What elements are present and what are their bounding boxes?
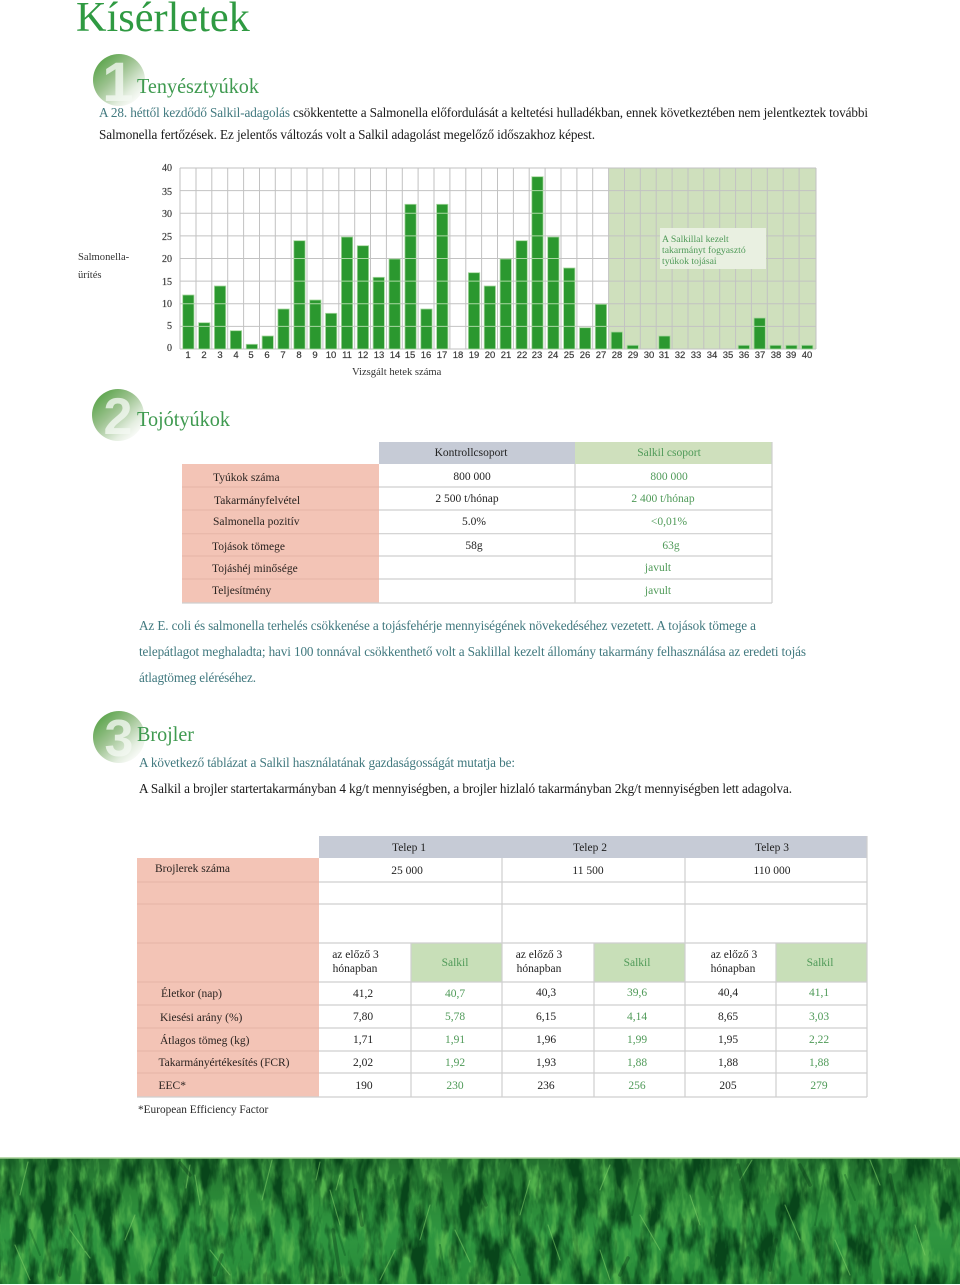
values: previous 3 months: 8,65 [718, 1011, 738, 1023]
values: previous 3 months: 6,15 [536, 1011, 556, 1023]
sub-header row: az előző 3 [711, 949, 758, 961]
row labels: Salmonella pozitív [213, 516, 300, 528]
light gridlines over bars [183, 191, 765, 326]
sub-header row: hónapban [517, 963, 562, 975]
row: number of broilers: Brojlerek száma [155, 863, 230, 875]
row labels: Teljesítmény [212, 585, 271, 597]
table backgrounds [137, 836, 867, 1097]
row: number of broilers [155, 863, 791, 877]
row labels: Tojáshéj minősége [212, 563, 298, 575]
x axis labels: 11 [342, 350, 352, 361]
table header text [435, 447, 702, 459]
sub-header row: az előző 3 [516, 949, 563, 961]
table: layer hens [182, 442, 772, 603]
text block: section 2 conclusion [139, 618, 806, 685]
y axis labels: 30 [162, 209, 172, 220]
row labels: Kiesési arány (%) [160, 1012, 243, 1024]
Salkil values: 800 000 [650, 471, 688, 483]
y axis labels: 10 [162, 299, 172, 310]
pale highlights along top edge [0, 1157, 960, 1159]
values: Salkil [445, 987, 829, 1092]
values: Salkil: 4,14 [627, 1011, 647, 1023]
row labels: EEC* [158, 1080, 186, 1092]
x axis labels [185, 350, 812, 361]
table header text: Telep 1 [392, 842, 426, 854]
text block: section 3 intro: A következő táblázat a Salkil használatának gazdaságosságát mutatja be: [139, 755, 515, 770]
values: previous 3 months: 1,95 [718, 1034, 738, 1046]
x axis labels: 12 [358, 350, 368, 361]
values: previous 3 months: 236 [537, 1080, 555, 1092]
row labels: Tyúkok száma [213, 472, 280, 484]
x axis labels: 15 [405, 350, 415, 361]
row: number of broilers: 11 500 [572, 865, 604, 877]
values: previous 3 months: 1,71 [353, 1034, 373, 1046]
sub-header row: Salkil [442, 957, 468, 969]
y axis labels: 35 [162, 187, 172, 198]
values: Salkil: 1,88 [627, 1057, 647, 1069]
text block: section 3 intro [139, 755, 792, 796]
x axis labels: 37 [755, 350, 765, 361]
x axis labels: 3 [217, 350, 223, 361]
values: Salkil: 1,92 [445, 1057, 465, 1069]
x axis labels: 39 [786, 350, 796, 361]
grass banner [0, 1158, 960, 1284]
row labels [158, 986, 290, 1092]
text block: section 1 intro: csökkentette a Salmonella előfordulását a keltetési hulladékban, ennek következtében nem jelentkeztek további [293, 105, 868, 120]
x axis labels: 40 [802, 350, 812, 361]
Salkil values: <0,01% [651, 516, 688, 528]
values: Salkil: 230 [446, 1080, 464, 1092]
values: previous 3 months: 190 [355, 1080, 373, 1092]
callout: Salkil feed note: takarmányt fogyasztó [662, 245, 746, 256]
row: number of broilers: 110 000 [754, 865, 791, 877]
footnote: *European Efficiency Factor [138, 1104, 269, 1116]
values: previous 3 months: 41,2 [353, 988, 373, 1000]
values: previous 3 months: 1,88 [718, 1057, 738, 1069]
x axis labels: 27 [596, 350, 606, 361]
bars [183, 177, 813, 349]
x axis labels: 17 [437, 350, 447, 361]
icon: number 1 badge: 1 [102, 50, 134, 113]
sub-header row: az előző 3 [332, 949, 379, 961]
x axis labels: 22 [517, 350, 527, 361]
section 2: heading with number badge [92, 388, 230, 446]
x axis labels: 2 [201, 350, 207, 361]
row labels [212, 472, 300, 597]
grid lines [180, 168, 816, 349]
y axis labels: 0 [167, 343, 172, 354]
control values: 2 500 t/hónap [435, 493, 499, 505]
table: broilers [137, 836, 867, 1097]
grass blades [15, 1160, 950, 1280]
Salkil values: javult [644, 562, 672, 574]
icon: number 1 badge [93, 50, 145, 113]
values: previous 3 months: 7,80 [353, 1011, 373, 1023]
x axis labels: 31 [659, 350, 669, 361]
x axis labels: 36 [739, 350, 749, 361]
table header text: Telep 3 [755, 842, 789, 854]
icon: number 3 badge: 3 [105, 710, 133, 768]
x axis labels: 20 [485, 350, 495, 361]
x axis labels: 19 [469, 350, 479, 361]
y-axis label [78, 252, 130, 281]
Salkil values: 63g [662, 540, 680, 552]
control values: 58g [465, 540, 483, 552]
values: Salkil: 41,1 [809, 987, 829, 999]
x axis labels: 23 [532, 350, 542, 361]
values: Salkil: 1,99 [627, 1034, 647, 1046]
Salkil values: javult [644, 585, 672, 597]
heading: Tojótyúkok: Tojótyúkok [137, 407, 230, 431]
text block: section 1 intro: A 28. héttől kezdődő Salkil-adagolás [99, 105, 290, 120]
values: Salkil: 256 [628, 1080, 646, 1092]
table header text: Salkil csoport [637, 447, 702, 459]
x axis labels: 13 [374, 350, 384, 361]
y axis labels: 40 [162, 163, 172, 174]
y axis labels: 25 [162, 232, 172, 243]
callout: Salkil feed note [660, 228, 766, 269]
callout: Salkil feed note: tyúkok tojásai [662, 256, 717, 267]
row labels: Takarmányfelvétel [214, 495, 300, 507]
x axis labels: 38 [771, 350, 781, 361]
text block: section 1 intro: Salmonella fertőzések. Ez jelentős változás volt a Salkil adagolást megelőző időszakhoz képest. [99, 127, 595, 142]
x axis labels: 32 [675, 350, 685, 361]
Salkil values [631, 471, 695, 597]
panel: Salkil treated zone [609, 168, 816, 349]
values: Salkil: 1,88 [809, 1057, 829, 1069]
control values: 800 000 [453, 471, 491, 483]
x axis labels: 30 [644, 350, 654, 361]
x axis labels: 1 [185, 350, 191, 361]
y-axis label: ürítés [78, 270, 102, 281]
x axis labels: 33 [691, 350, 701, 361]
x axis labels: 18 [453, 350, 463, 361]
heading: Tenyésztyúkok: Tenyésztyúkok [137, 74, 259, 98]
row labels: Takarmányértékesítés (FCR) [158, 1057, 290, 1069]
values: previous 3 months: 205 [719, 1080, 737, 1092]
values: previous 3 months: 40,3 [536, 987, 556, 999]
values: previous 3 months: 40,4 [718, 987, 738, 999]
x axis labels: 35 [723, 350, 733, 361]
values: Salkil: 1,91 [445, 1034, 465, 1046]
table header text: Telep 2 [573, 842, 607, 854]
row labels: Átlagos tömeg (kg) [160, 1033, 250, 1047]
table header text: Kontrollcsoport [435, 447, 508, 459]
control values [435, 471, 499, 552]
control values: 5.0% [462, 516, 486, 528]
y axis labels: 15 [162, 277, 172, 288]
y axis labels: 5 [167, 321, 172, 332]
x axis labels: 7 [280, 350, 286, 361]
x axis labels: 29 [628, 350, 638, 361]
values: Salkil: 5,78 [445, 1011, 465, 1023]
values: previous 3 months: 1,96 [536, 1034, 556, 1046]
text block: section 3 intro: A Salkil a brojler startertakarmányban 4 kg/t mennyiségben, a brojler hizlaló takarmányban 2kg/t mennyiségben lett adagolva. [139, 781, 792, 796]
values: Salkil: 2,22 [809, 1034, 829, 1046]
icon: number 2 badge: 2 [104, 388, 132, 446]
x axis labels: 24 [548, 350, 558, 361]
x axis labels: 16 [421, 350, 431, 361]
x axis labels: 34 [707, 350, 717, 361]
x axis labels: 5 [248, 350, 254, 361]
values: previous 3 months: 2,02 [353, 1057, 373, 1069]
text block: section 2 conclusion: Az E. coli és salmonella terhelés csökkenése a tojásfehérje mennyiségének növekedéséhez vezetett. A tojások tömege a [139, 618, 756, 633]
x axis labels: 28 [612, 350, 622, 361]
table header text [392, 842, 789, 854]
callout: Salkil feed note: A Salkillal kezelt [662, 234, 729, 245]
x axis labels: 6 [264, 350, 270, 361]
values: Salkil: 279 [810, 1080, 828, 1092]
values: Salkil: 3,03 [809, 1011, 829, 1023]
x axis labels: 21 [501, 350, 511, 361]
x axis labels: 8 [296, 350, 302, 361]
section 3: heading with number badge [93, 710, 194, 768]
y-axis label: Salmonella- [78, 252, 130, 263]
text block: section 2 conclusion: átlagtömeg eléréséhez. [139, 670, 256, 685]
sub-header row [332, 949, 833, 975]
sub-header row: hónapban [333, 963, 378, 975]
x axis labels: 26 [580, 350, 590, 361]
x-axis title: Vizsgált hetek száma [352, 367, 442, 378]
values: Salkil: 40,7 [445, 988, 465, 1000]
x axis labels: 10 [326, 350, 336, 361]
heading: Brojler: Brojler [137, 722, 194, 746]
sub-header row: hónapban [711, 963, 756, 975]
bar chart: salmonella shedding [162, 163, 816, 361]
row labels: Életkor (nap) [161, 986, 222, 1000]
Salkil values: 2 400 t/hónap [631, 493, 695, 505]
sub-header row: Salkil [807, 957, 833, 969]
section 1: heading with number badge [93, 50, 259, 113]
values: previous 3 months: 1,93 [536, 1057, 556, 1069]
values: Salkil: 39,6 [627, 987, 647, 999]
y axis labels [162, 163, 172, 354]
x axis labels: 14 [390, 350, 400, 361]
text block: section 2 conclusion: telepátlagot meghaladta; havi 100 tonnával csökkenthető volt a Saklillal kezelt állomány takarmány felhasználása az eredeti tojás [139, 644, 806, 659]
row: number of broilers: 25 000 [391, 865, 423, 877]
x axis labels: 25 [564, 350, 574, 361]
text block: section 1 intro [99, 105, 868, 142]
x axis labels: 9 [312, 350, 318, 361]
row labels: Tojások tömege [212, 541, 285, 553]
x axis labels: 4 [233, 350, 239, 361]
y axis labels: 20 [162, 254, 172, 265]
values: previous 3 months [353, 987, 738, 1092]
table backgrounds [182, 442, 772, 603]
sub-header row: Salkil [624, 957, 650, 969]
